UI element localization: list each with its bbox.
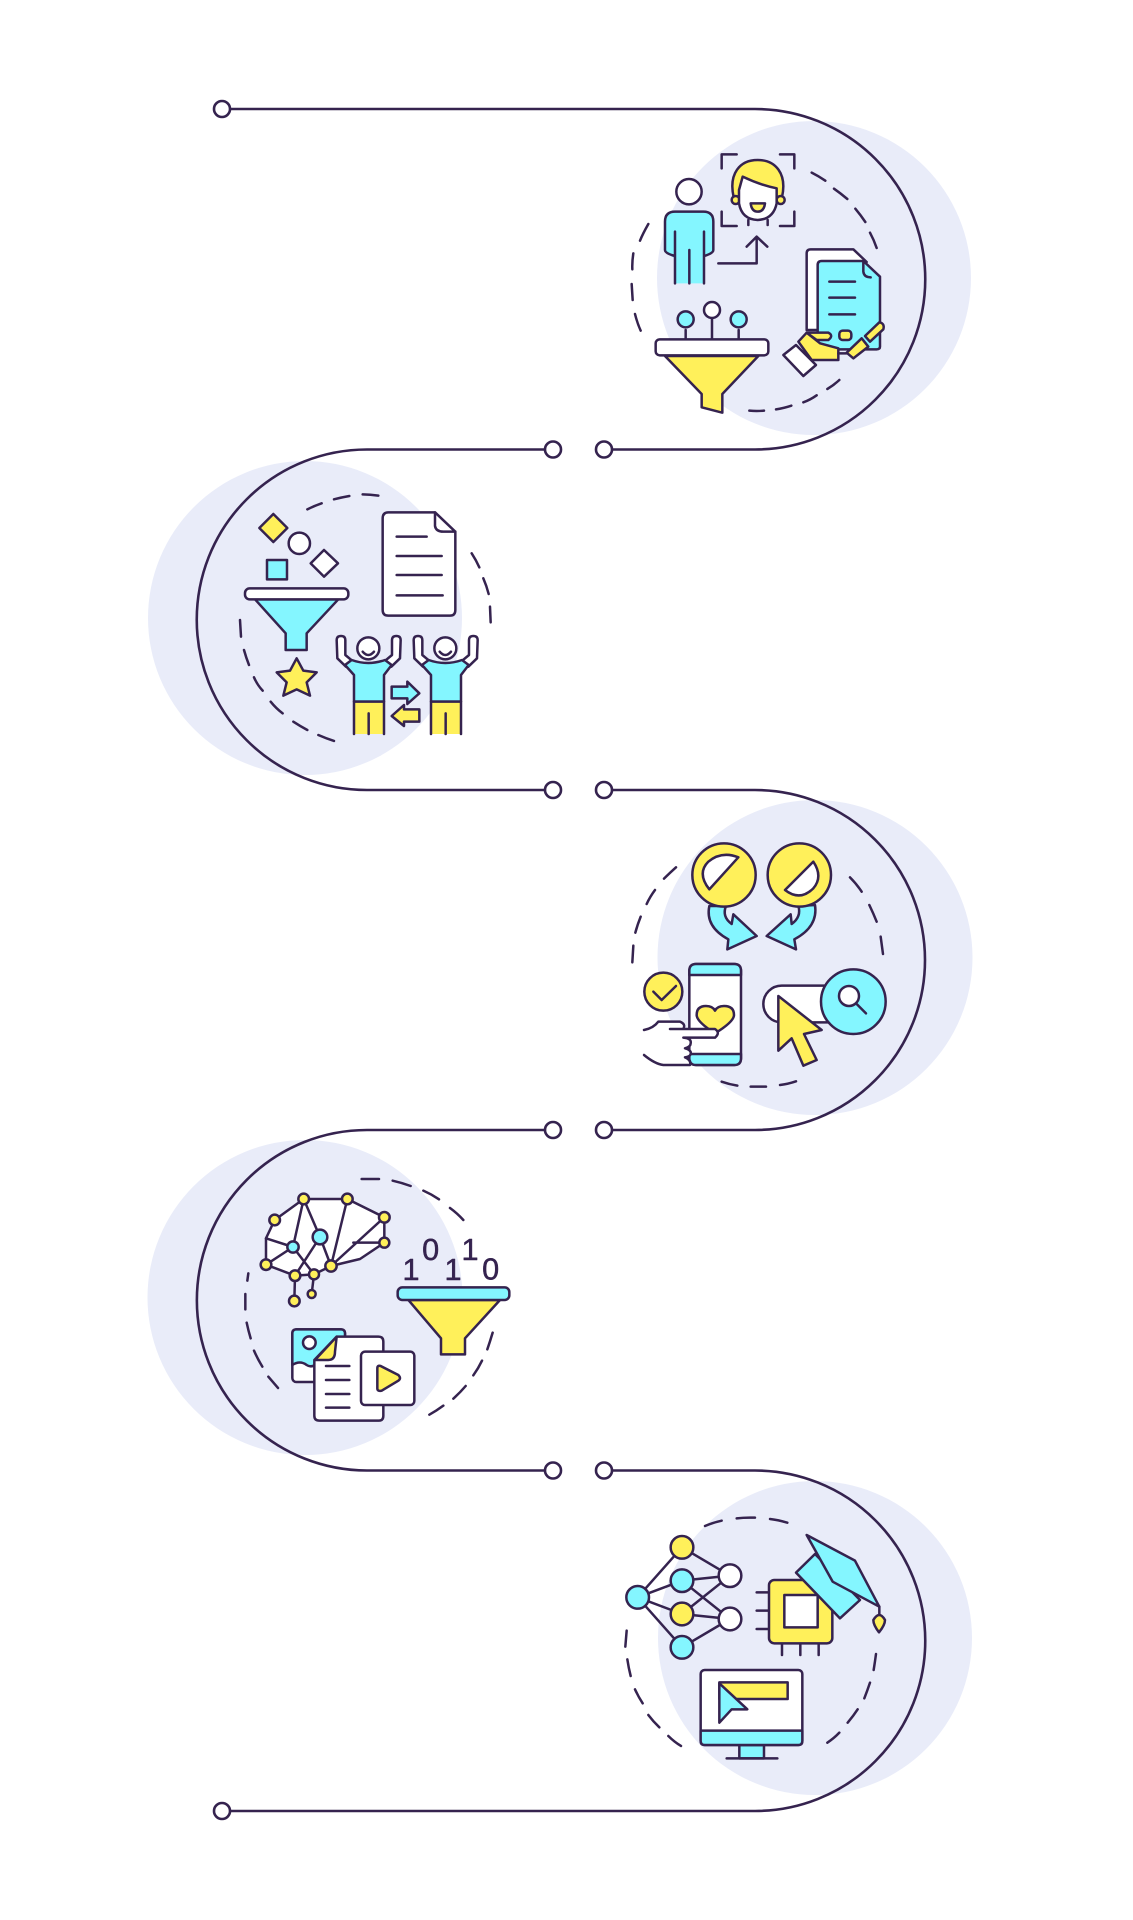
icon: funnel with star [245, 588, 348, 696]
icon: image, document and video files [292, 1329, 414, 1421]
icon group 5: neural network, chip with cap and monitor [625, 1518, 885, 1758]
icon: exchange arrows [392, 682, 419, 726]
icon: person one [337, 636, 401, 734]
binary digits: 0 [422, 1233, 439, 1267]
icon: microchip [757, 1580, 832, 1655]
icon: falling shapes [259, 514, 338, 579]
icon: swap arrows [709, 905, 815, 949]
icon group 2: shape funnel, document and two people [240, 494, 491, 741]
icon: data funnel [398, 1287, 509, 1354]
icon group 3: pills, phone and search cursor [632, 843, 886, 1087]
binary digits: 1 [461, 1233, 479, 1267]
icon: person two [414, 636, 478, 734]
icon: neural network [626, 1536, 741, 1659]
icon: funnel with dots [656, 302, 768, 413]
icon: graduation cap [796, 1535, 885, 1632]
binary digits: 0 [482, 1252, 499, 1286]
icon: neural brain [261, 1194, 390, 1306]
background circles [148, 121, 972, 1795]
icon group 4: neural brain, data funnel and media files [245, 1179, 509, 1421]
timeline node markers [214, 101, 612, 1819]
icon: arrow up [718, 237, 767, 263]
icon: standing person [665, 179, 713, 283]
icon: search bar with cursor [763, 969, 886, 1066]
icon group 1: person selection, document and funnel [632, 154, 884, 413]
icon: document [383, 512, 455, 616]
icon: monitor with cursor [701, 1670, 802, 1758]
binary digits: 1 [444, 1253, 462, 1287]
icon: document in robot hand [783, 249, 884, 376]
icon: face scan [722, 154, 794, 226]
icon: right split circle [768, 843, 831, 907]
connecting timeline path [197, 109, 925, 1811]
binary digits: 1 [402, 1253, 420, 1287]
icon: phone with heart and hand [644, 964, 741, 1065]
binary digits [402, 1233, 499, 1287]
icon: left split circle [692, 843, 756, 907]
